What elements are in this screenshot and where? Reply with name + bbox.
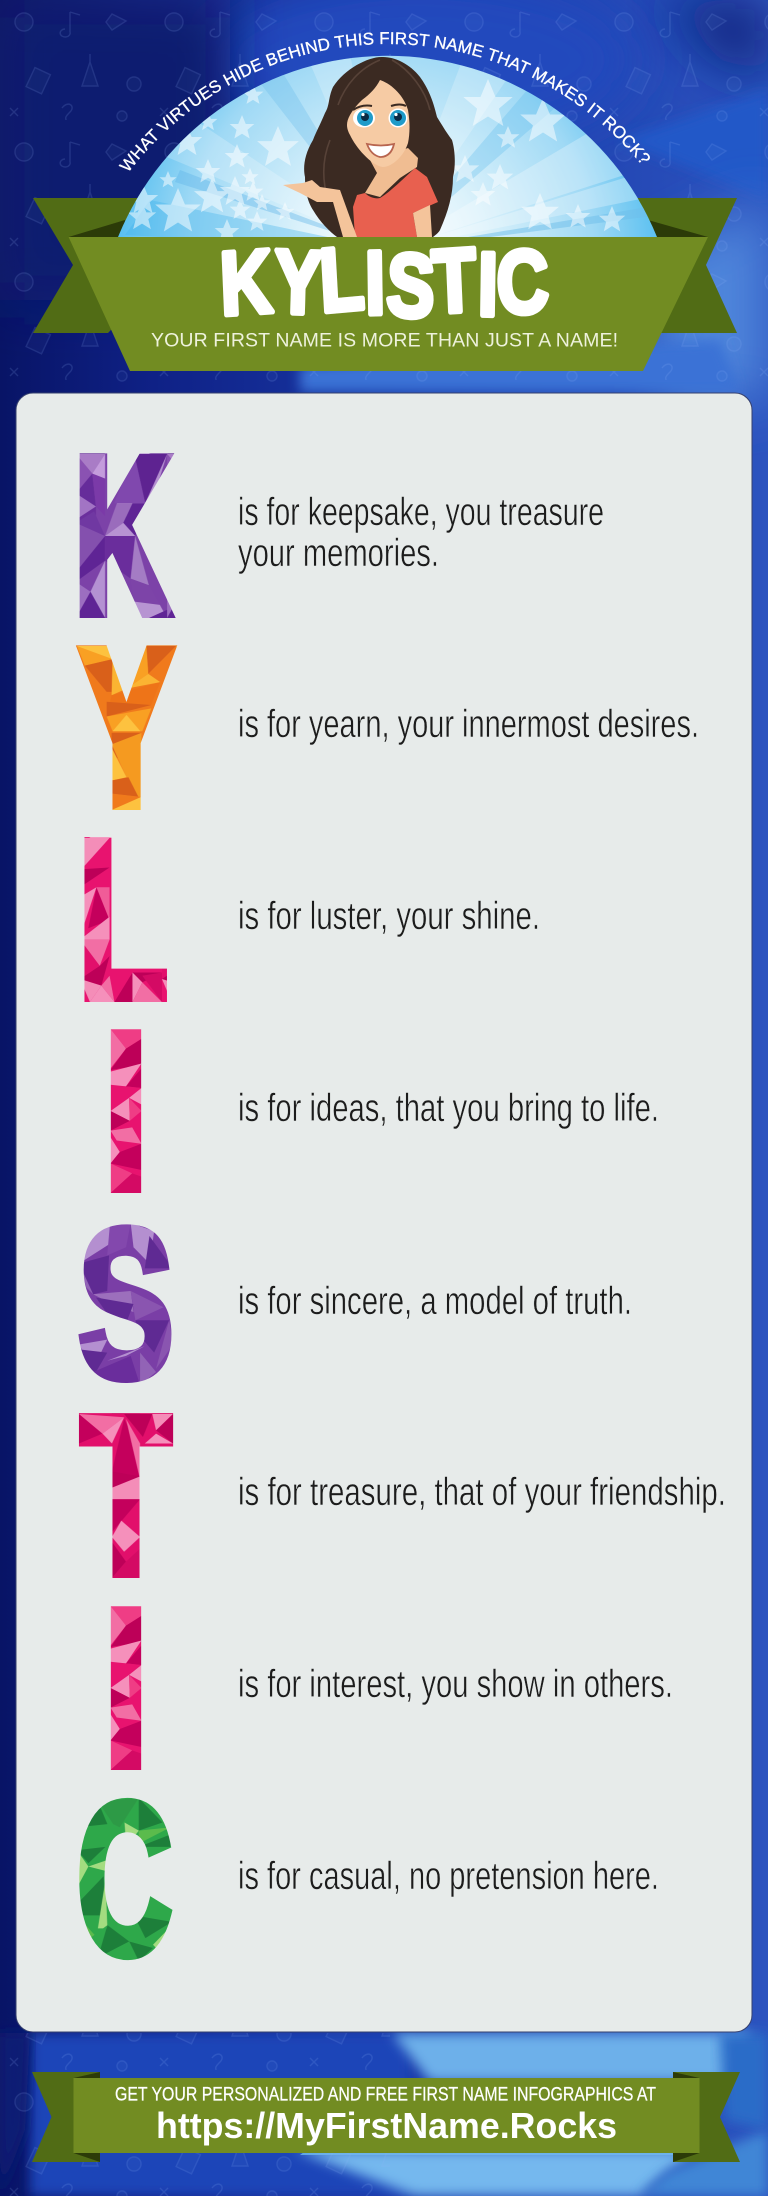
footer centre bbox=[74, 2078, 700, 2153]
letter L: L bbox=[77, 791, 169, 1046]
ribbon folds bbox=[69, 220, 708, 237]
right arm bbox=[413, 205, 432, 237]
footer call to action: GET YOUR PERSONALIZED AND FREE FIRST NAME INFOGRAPHICS AT bbox=[115, 2084, 656, 2106]
name title: KYLISTIC bbox=[218, 228, 550, 338]
character illustration bbox=[283, 57, 455, 237]
hair highlights bbox=[324, 60, 430, 200]
header ribbon tails bbox=[33, 198, 737, 333]
star field bbox=[128, 79, 625, 243]
main panel bbox=[16, 393, 752, 2032]
text S: is for sincere, a model of truth. bbox=[238, 1280, 632, 1323]
left ribbon tail bbox=[33, 198, 140, 333]
row S bbox=[78, 1187, 632, 1422]
footer folds bbox=[74, 2072, 700, 2162]
row I bbox=[97, 978, 659, 1244]
footer ribbon bbox=[32, 2072, 740, 2162]
neck and chest bbox=[365, 148, 418, 197]
text K: is for keepsake, you treasure bbox=[238, 491, 604, 534]
hair bbox=[304, 57, 455, 237]
curved tagline: WHAT VIRTUES HIDE BEHIND THIS FIRST NAME THAT MAKES IT ROCK? bbox=[118, 32, 650, 170]
letter K: K bbox=[76, 416, 167, 656]
letter I: I bbox=[97, 978, 155, 1244]
light rays bbox=[126, 58, 648, 237]
footer right tail bbox=[673, 2072, 740, 2162]
row C bbox=[77, 1759, 659, 1999]
row K bbox=[76, 416, 604, 656]
row L bbox=[77, 791, 540, 1046]
letter T: T bbox=[80, 1368, 172, 1622]
left arm and hand bbox=[283, 180, 357, 237]
text K: your memories. bbox=[238, 532, 439, 575]
row T bbox=[80, 1368, 726, 1622]
letter Y: Y bbox=[81, 605, 172, 850]
letter I second: I bbox=[97, 1555, 155, 1821]
row Y bbox=[81, 605, 699, 850]
footer url: https://MyFirstName.Rocks bbox=[156, 2105, 617, 2146]
footer left tail bbox=[32, 2072, 100, 2162]
letter C: C bbox=[77, 1759, 172, 1999]
letter S: S bbox=[78, 1187, 174, 1422]
face bbox=[347, 80, 410, 167]
text L: is for luster, your shine. bbox=[238, 895, 540, 938]
right eye bbox=[388, 104, 408, 128]
ribbon panel bbox=[69, 237, 708, 371]
ribbon subtitle: YOUR FIRST NAME IS MORE THAN JUST A NAME! bbox=[151, 330, 618, 352]
left eye bbox=[353, 106, 375, 128]
header illustration dome bbox=[118, 56, 657, 237]
header ribbon centre bbox=[69, 228, 708, 371]
row I second bbox=[97, 1555, 673, 1821]
shirt bbox=[353, 168, 438, 237]
right ribbon tail bbox=[632, 198, 737, 333]
mouth bbox=[367, 144, 394, 157]
